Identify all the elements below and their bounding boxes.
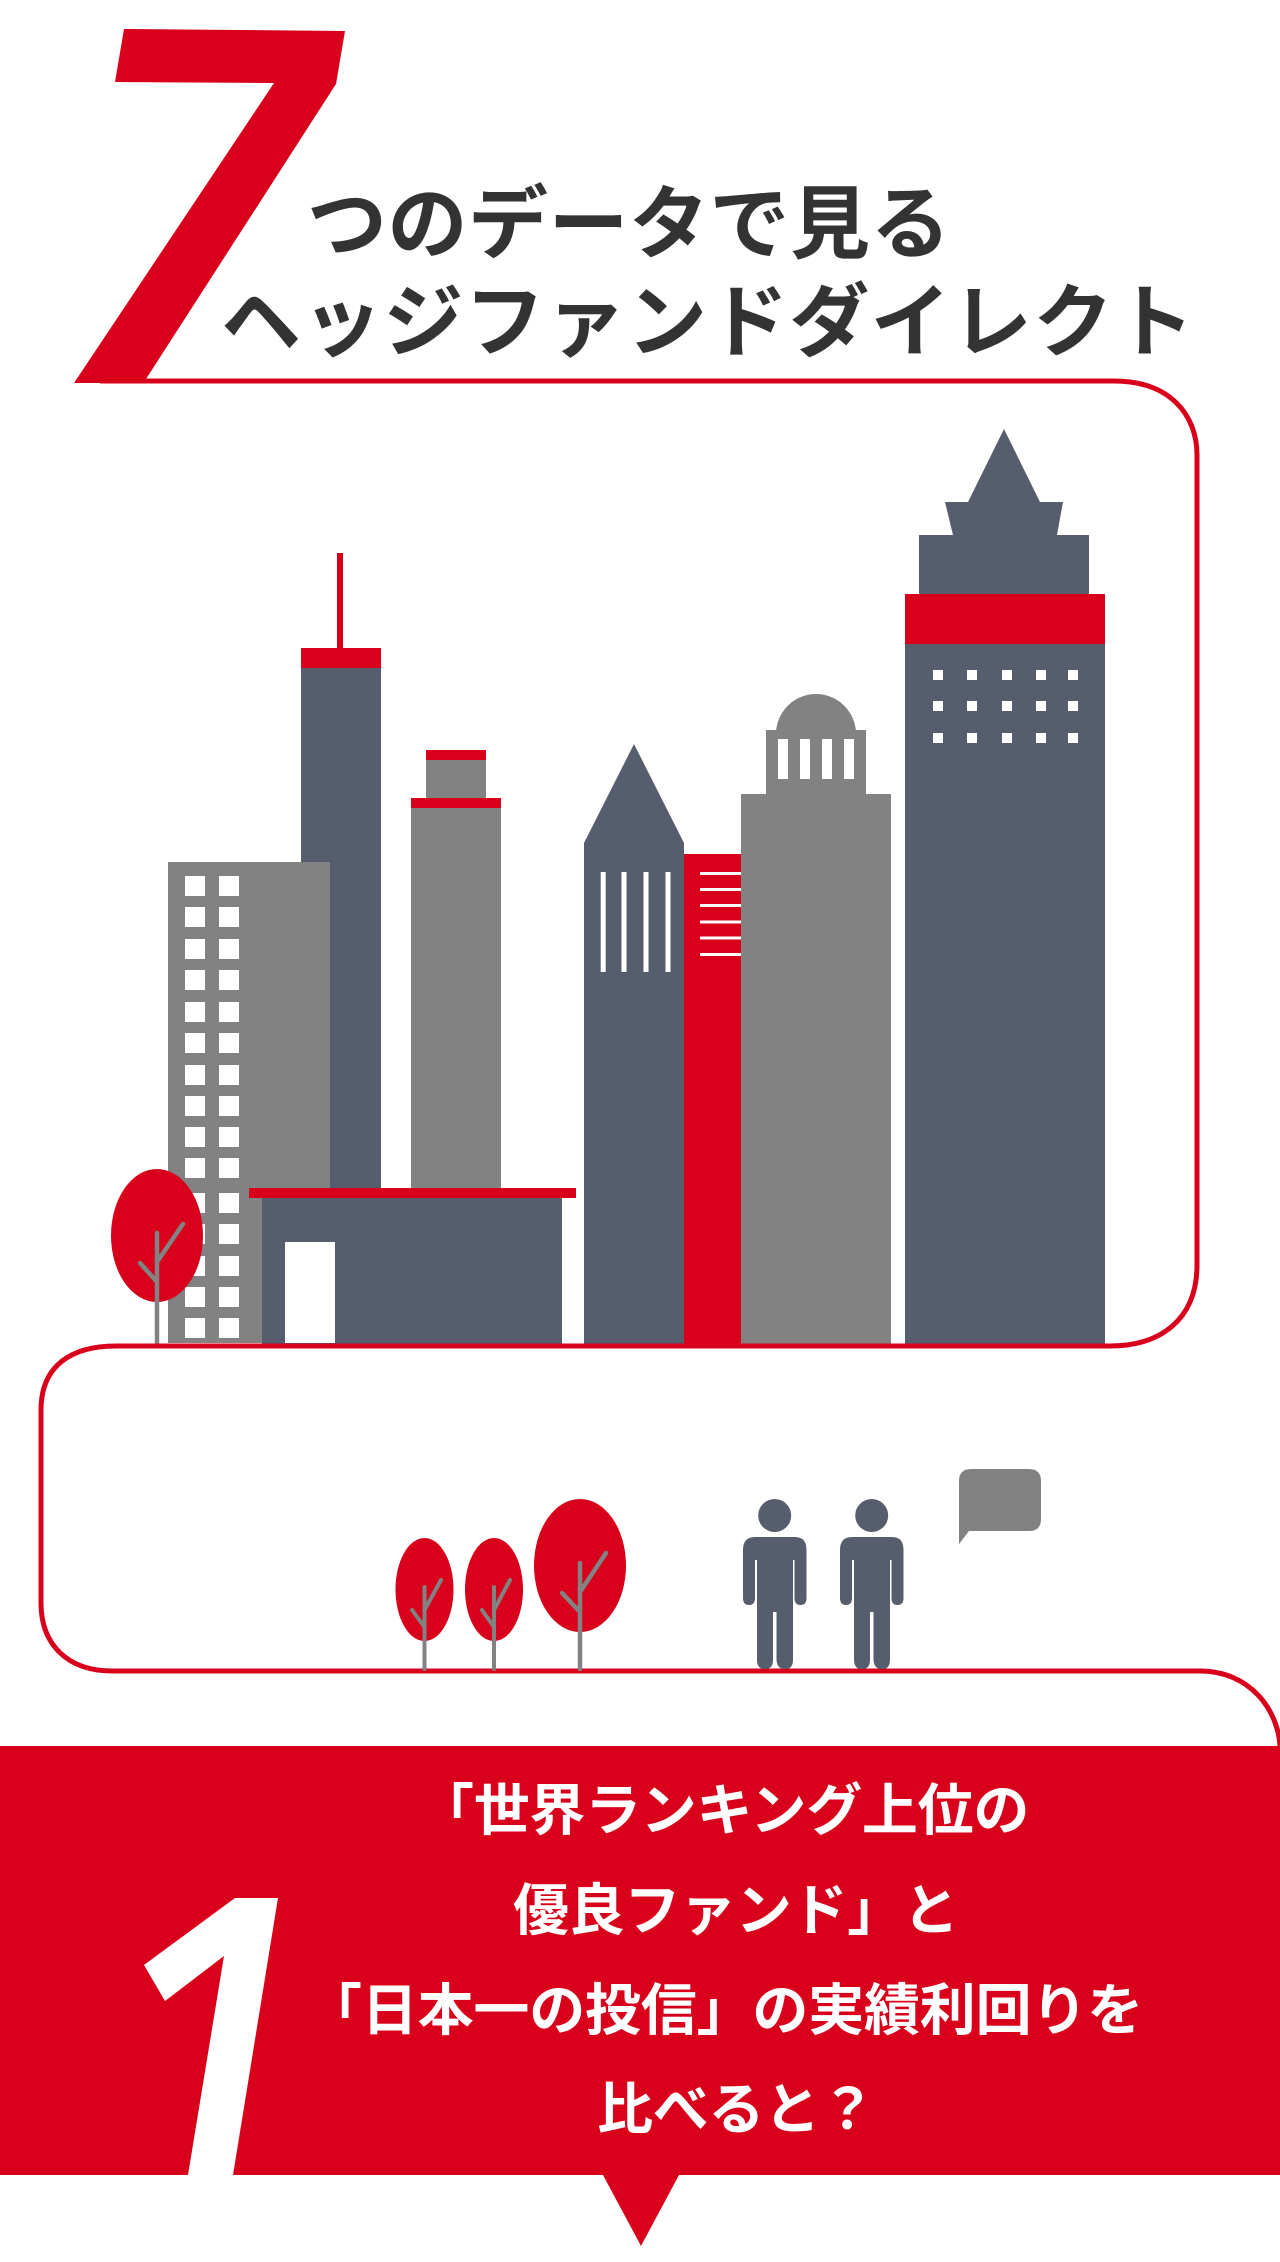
building: tall dark tower with antenna — [301, 553, 381, 1190]
building: low dark block with red roof and door — [249, 1188, 576, 1344]
section heading: 比べると？ — [597, 2078, 876, 2141]
tree beside the apartment block — [111, 1169, 203, 1343]
section heading — [306, 1779, 1143, 2141]
street scene: trees — [396, 1499, 626, 1669]
person 1 — [743, 1499, 806, 1669]
building: grey apartment block with windows — [168, 862, 330, 1343]
person 2 — [840, 1499, 904, 1669]
title: ヘッジファンドダイレクト — [221, 278, 1195, 367]
building: grey stepped tower — [411, 750, 501, 1190]
large tree — [534, 1499, 626, 1669]
winding red path line — [41, 381, 1280, 1746]
speech bubble — [959, 1469, 1041, 1544]
big numeral 7 — [74, 29, 345, 383]
section heading: 優良ファンド」と — [513, 1879, 959, 1942]
building: dark spire — [584, 744, 684, 1344]
building: narrow red block with white lines — [684, 854, 742, 1346]
building: tallest dark tower with red band — [905, 429, 1105, 1345]
small tree 1 — [396, 1538, 454, 1669]
city skyline illustration — [111, 429, 1105, 1346]
title — [221, 180, 1195, 367]
big numeral 1 — [144, 1898, 278, 2175]
small tree 2 — [465, 1538, 523, 1669]
title: つのデータで見る — [307, 180, 951, 269]
section heading: 「世界ランキング上位の — [418, 1779, 1029, 1842]
red section banner with pointer — [0, 1746, 1280, 2246]
building: grey domed tower — [741, 694, 891, 1345]
section heading: 「日本一の投信」の実績利回りを — [306, 1979, 1143, 2042]
